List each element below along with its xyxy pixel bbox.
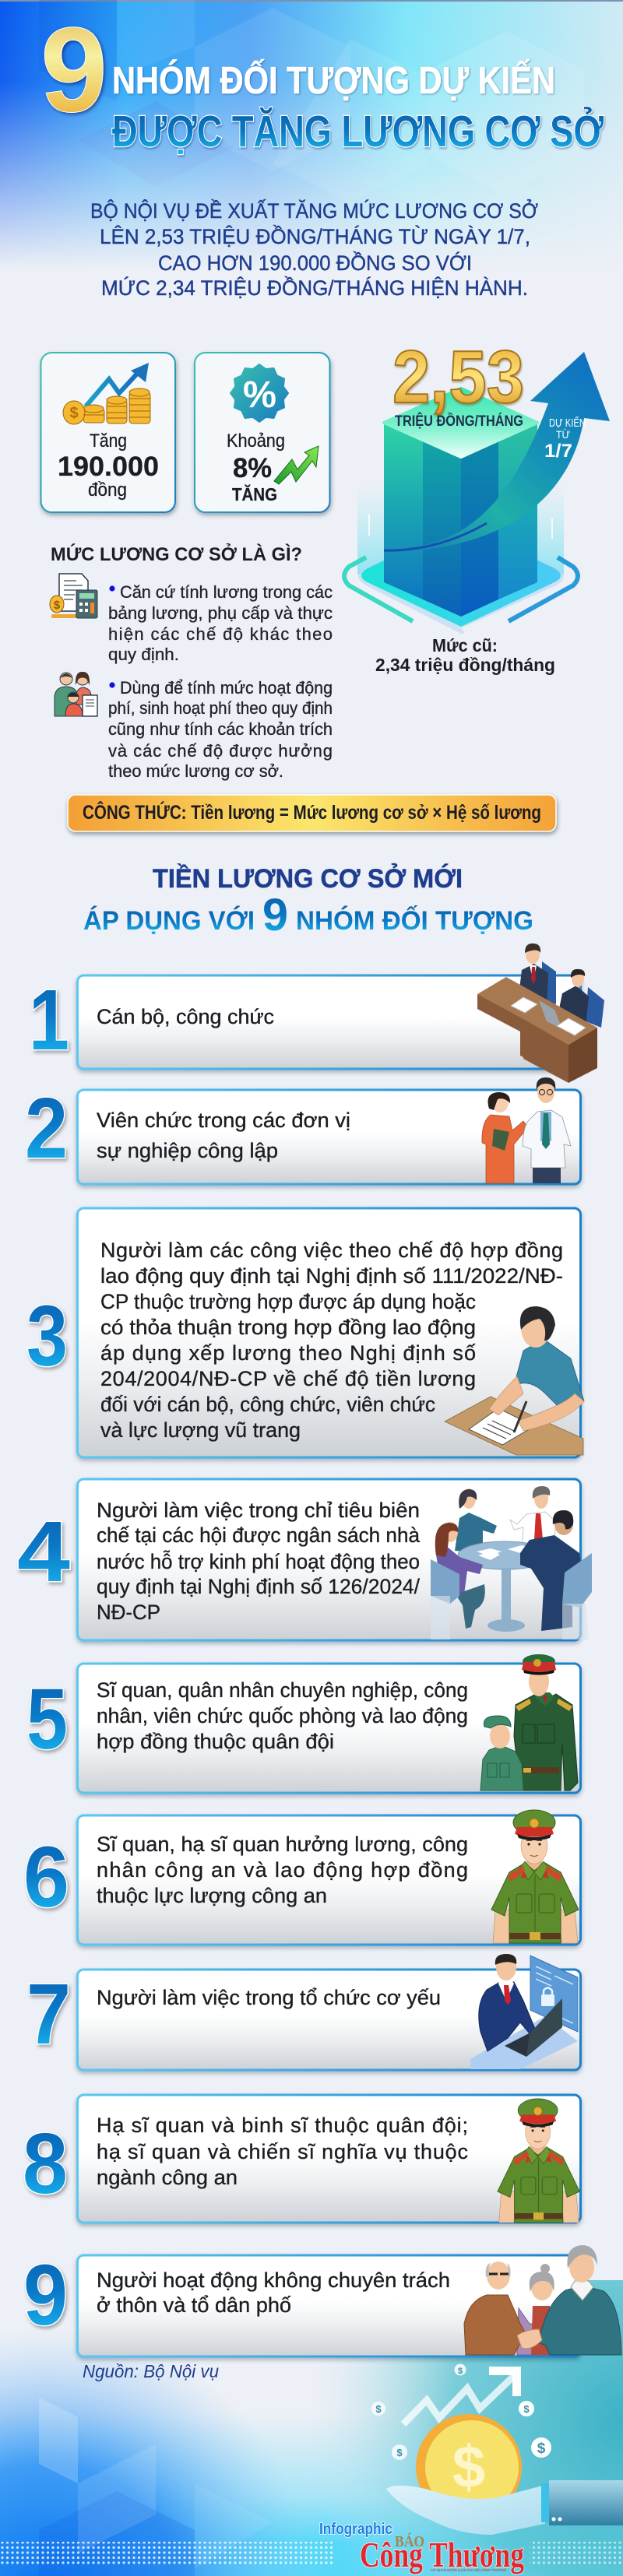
hand and sleeve [386,2480,623,2535]
gold coin: $ [452,2434,485,2500]
intro text [90,198,538,300]
section heading: 9 groups: 9 [262,890,288,940]
intro text: LÊN 2,53 TRIỆU ĐỒNG/THÁNG TỪ NGÀY 1/7, [100,224,530,248]
bullet text 2: phí, sinh hoạt phí theo quy định [108,698,333,718]
number 8: 8 [23,2116,68,2212]
arrow label: DỰ KIẾN [549,416,586,430]
bullet text 2: theo mức lương cơ sở. [108,761,283,781]
number 3: 3 [26,1288,68,1384]
number 5: 5 [26,1671,68,1767]
stat text: đồng [88,480,127,501]
text: sự nghiệp công lập [97,1139,278,1162]
number 2: 2 [25,1081,68,1176]
stat text [227,431,285,504]
text: Người làm việc trong chỉ tiêu biên [97,1499,420,1522]
number 6: 6 [23,1829,69,1925]
bullet text 1: quy định. [108,645,179,664]
section heading: 9 groups: ÁP DỤNG VỚI [83,906,255,936]
stat text: Khoảng [227,431,285,452]
text: Người hoạt động không chuyên trách [97,2268,450,2292]
text: đối với cán bộ, công chức, viên chức [100,1393,435,1416]
illustration: man at secure computer [470,1954,578,2069]
text: nước hỗ trợ kinh phí hoạt động theo [97,1549,420,1573]
dollar bubbles [371,2363,551,2460]
illustration: officials at desks [477,944,604,1083]
panel: group 8 [23,2095,581,2223]
stat card: about 8% [195,353,330,512]
text: thuộc lực lượng công an [97,1884,327,1907]
bullet text 1: Căn cứ tính lương trong các [120,582,333,602]
header background [0,0,623,270]
dollar bubbles: $ [458,2367,463,2376]
intro text: BỘ NỘI VỤ ĐỀ XUẤT TĂNG MỨC LƯƠNG CƠ SỞ [90,198,538,223]
dollar bubbles: $ [523,2403,530,2415]
illustration: young police officer [498,2099,579,2223]
icon: coins and rising arrow: $ [69,405,79,422]
icon: document and calculator: $ [54,599,61,612]
panel: group 4 [17,1479,592,1640]
text: ở thôn và tổ dân phố [97,2293,291,2317]
gold coin [416,2414,522,2520]
text [97,1109,350,1162]
text: Sĩ quan, quân nhân chuyên nghiệp, công [97,1678,468,1702]
text: ngành công an [97,2166,238,2189]
stat text: Tăng [90,431,127,452]
logo: Infographic Bao Cong Thuong [319,2521,524,2574]
old salary label: 2,34 triệu đồng/tháng [375,655,555,675]
intro text: MỨC 2,34 TRIỆU ĐỒNG/THÁNG HIỆN HÀNH. [101,276,528,300]
big gold number 9: 9 [40,2,107,137]
title: NHÓM ĐỐI TƯỢNG DỰ KIẾN [112,59,555,102]
panel: group 9 [23,2245,621,2356]
stat card: increase 190.000 [40,353,175,512]
section heading: what is base salary: MỨC LƯƠNG CƠ SỞ LÀ GÌ? [51,543,302,565]
illustration: man writing [445,1306,584,1455]
bullet text 1 [108,582,333,664]
dollar bubbles: $ [396,2447,403,2458]
number 7: 7 [26,1966,71,2062]
text: lao động quy định tại Nghị định số 111/2022/NĐ- [100,1264,563,1288]
illustration: teacher and doctor [482,1077,571,1183]
illustration: meeting at round table [431,1486,592,1639]
illustration: coin in hand with rising arrow [371,2363,623,2535]
dollar bubbles: $ [537,2441,546,2457]
text: CP thuộc trường hợp được áp dụng hoặc [100,1290,476,1313]
bullet text 1: bảng lương, phụ cấp và thực [108,603,333,623]
bullet text 2: Dùng để tính mức hoạt động [120,678,333,698]
old salary label: Mức cũ: [432,635,498,655]
bullet text 1: hiện các chế độ khác theo [108,624,333,644]
arrow label: TỪ [556,428,570,441]
text [97,1833,468,1907]
number 4: 4 [17,1504,70,1600]
text: Sĩ quan, hạ sĩ quan hưởng lương, công [97,1833,468,1856]
number 9: 9 [23,2247,68,2343]
text: Viên chức trong các đơn vị [97,1109,350,1132]
stat text [58,431,159,501]
title [112,59,604,156]
icon: percent badge: % [243,374,276,416]
text: nhân, viên chức quốc phòng và lao động [97,1704,468,1727]
panel: group 2 [25,1077,581,1184]
text [97,1499,421,1624]
text: và lực lượng vũ trang [100,1418,301,1442]
text: chế tại các hội được ngân sách nhà [97,1523,421,1547]
icon: percent badge [231,364,288,422]
icon: green arrow [274,446,319,484]
text: Cán bộ, công chức [97,1005,274,1028]
number 1: 1 [29,972,69,1068]
section heading: 9 groups: TIỀN LƯƠNG CƠ SỞ MỚI [153,864,463,894]
arrow label: 1/7 [544,441,572,462]
illustration: elders shaking hands [464,2245,621,2355]
text [97,2114,468,2189]
panel: group 7 [26,1954,581,2070]
bullet text 2: và các chế độ được hưởng [108,741,333,761]
text: hạ sĩ quan và chiến sĩ nghĩa vụ thuộc [97,2140,468,2163]
bullet text 2 [108,678,333,781]
text: 204/2004/NĐ-CP về chế độ tiền lương [100,1367,476,1390]
panel: group 6 [23,1810,581,1945]
logo: Infographic Bao Cong Thuong: CƠ QUAN NGÔN LUẬN CỦA BỘ CÔNG THƯƠNG [431,2567,506,2572]
footer background [0,2280,623,2576]
icon: coins and rising arrow [63,363,150,424]
logo: Infographic Bao Cong Thuong: Infographic [319,2521,392,2538]
text: Người làm các công việc theo chế độ hợp đồng [100,1239,563,1262]
3D salary column chart [344,336,610,634]
panel: group 5 [26,1654,581,1793]
icon: document and calculator [50,574,97,618]
column body [384,388,537,617]
text: Hạ sĩ quan và binh sĩ thuộc quân đội; [97,2114,468,2137]
arrow label [544,416,586,462]
bullet text 2: cũng như tính các khoản trích [108,719,333,739]
text: nhân công an và lao động hợp đồng [97,1858,468,1882]
illustration: police officer [491,1810,579,1943]
stat text: TĂNG [232,483,277,504]
platform [344,524,578,634]
illustration: soldiers [480,1654,578,1791]
section heading: 9 groups [83,864,533,940]
section heading: 9 groups: NHÓM ĐỐI TƯỢNG [296,905,533,936]
panel: group 1 [29,944,604,1083]
icon: family with document [55,672,97,716]
text [100,1239,563,1442]
stat text: 8% [233,453,272,483]
source note: Nguồn: Bộ Nội vụ [83,2361,219,2381]
text: áp dụng xếp lương theo Nghị định số [100,1341,476,1365]
unit: TRIỆU ĐỒNG/THÁNG [395,413,523,430]
stat text: 190.000 [58,452,159,482]
value 2,53: 2,53 [392,336,524,419]
text: NĐ-CP [97,1601,160,1624]
old salary label [375,635,555,675]
glow around column [357,483,564,575]
panel: group 3 [26,1208,584,1457]
text: hợp đồng thuộc quân đội [97,1730,334,1753]
text [97,1678,468,1753]
text: có thỏa thuận trong hợp đồng lao động [100,1316,476,1339]
text: quy định tại Nghị định số 126/2024/ [97,1575,420,1598]
formula bar [68,795,556,831]
dollar bubbles: $ [375,2403,382,2415]
logo: Infographic Bao Cong Thuong: Công Thương [360,2535,524,2574]
intro text: CAO HƠN 190.000 ĐỒNG SO VỚI [158,251,472,275]
rising arrow [384,352,610,552]
logo: Infographic Bao Cong Thuong: BÁO [395,2532,424,2550]
rising arrow [403,2367,521,2424]
text [97,2268,450,2317]
text: Người làm việc trong tổ chức cơ yếu [97,1986,441,2009]
